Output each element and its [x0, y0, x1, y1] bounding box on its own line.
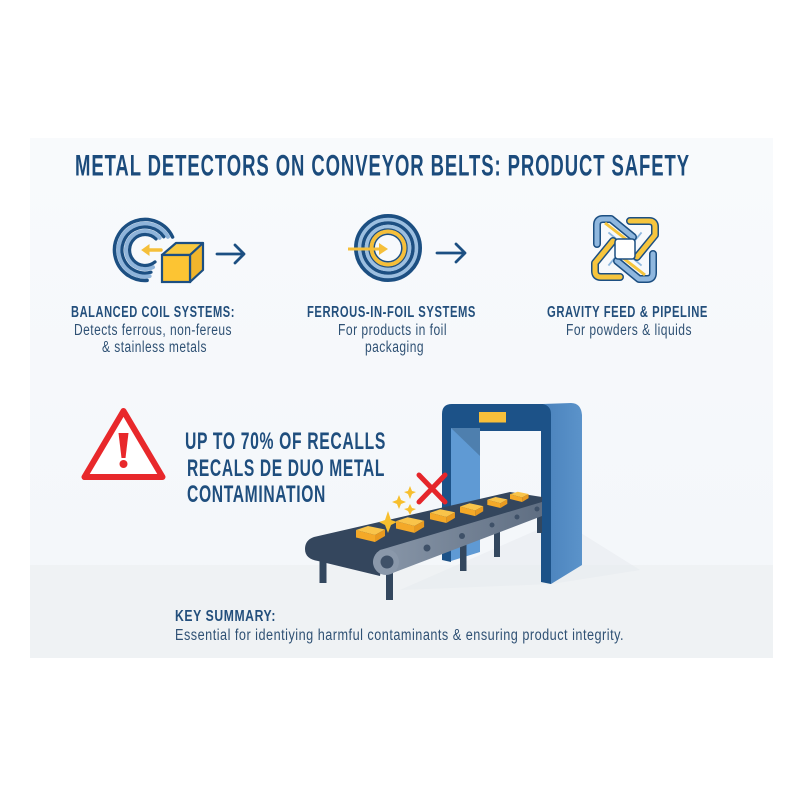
products: [356, 492, 529, 542]
key summary: [175, 608, 624, 644]
panel: balanced coil systems: [71, 219, 244, 356]
icon: warning triangle: [84, 411, 162, 477]
key summary: KEY SUMMARY:: [175, 608, 276, 625]
description: [338, 322, 447, 356]
heading: BALANCED COIL SYSTEMS:: [71, 304, 235, 321]
warning statistic: RECALS DE DUO METAL: [187, 455, 385, 482]
floor shadow: [400, 520, 640, 590]
rail holes: [424, 506, 540, 552]
arrow: [437, 244, 465, 262]
icon: interlocked pipes: [595, 219, 655, 279]
description: [74, 322, 232, 356]
belt surface: [305, 492, 542, 576]
icon: ferrous-in-foil coil: [348, 216, 420, 280]
conveyor belt: [305, 492, 542, 600]
red x mark: [419, 475, 445, 502]
end roller: [373, 549, 399, 575]
panel: gravity feed and pipeline: [547, 219, 708, 339]
warning statistic: [185, 428, 386, 508]
legs: [320, 510, 542, 600]
description: For products in foil: [338, 322, 447, 339]
key summary: Essential for identiying harmful contaminants & ensuring product integrity.: [175, 627, 624, 644]
sparkles: [379, 486, 416, 533]
arrow: [217, 245, 244, 263]
heading: GRAVITY FEED & PIPELINE: [547, 304, 708, 321]
panel: ferrous-in-foil systems: [307, 216, 476, 356]
icon: balanced coil with box: [114, 219, 203, 282]
description: Detects ferrous, non-fereus: [74, 322, 232, 339]
warning statistic: CONTAMINATION: [187, 481, 326, 508]
metal detector gate: [442, 403, 582, 584]
side rail: [373, 502, 542, 574]
floor strip: [30, 565, 773, 658]
background panel: [30, 138, 773, 658]
description: packaging: [365, 339, 424, 356]
description: For powders & liquids: [566, 322, 692, 339]
heading: FERROUS-IN-FOIL SYSTEMS: [307, 304, 476, 321]
description: & stainless metals: [102, 339, 207, 356]
warning statistic: UP TO 70% OF RECALLS: [185, 428, 386, 455]
